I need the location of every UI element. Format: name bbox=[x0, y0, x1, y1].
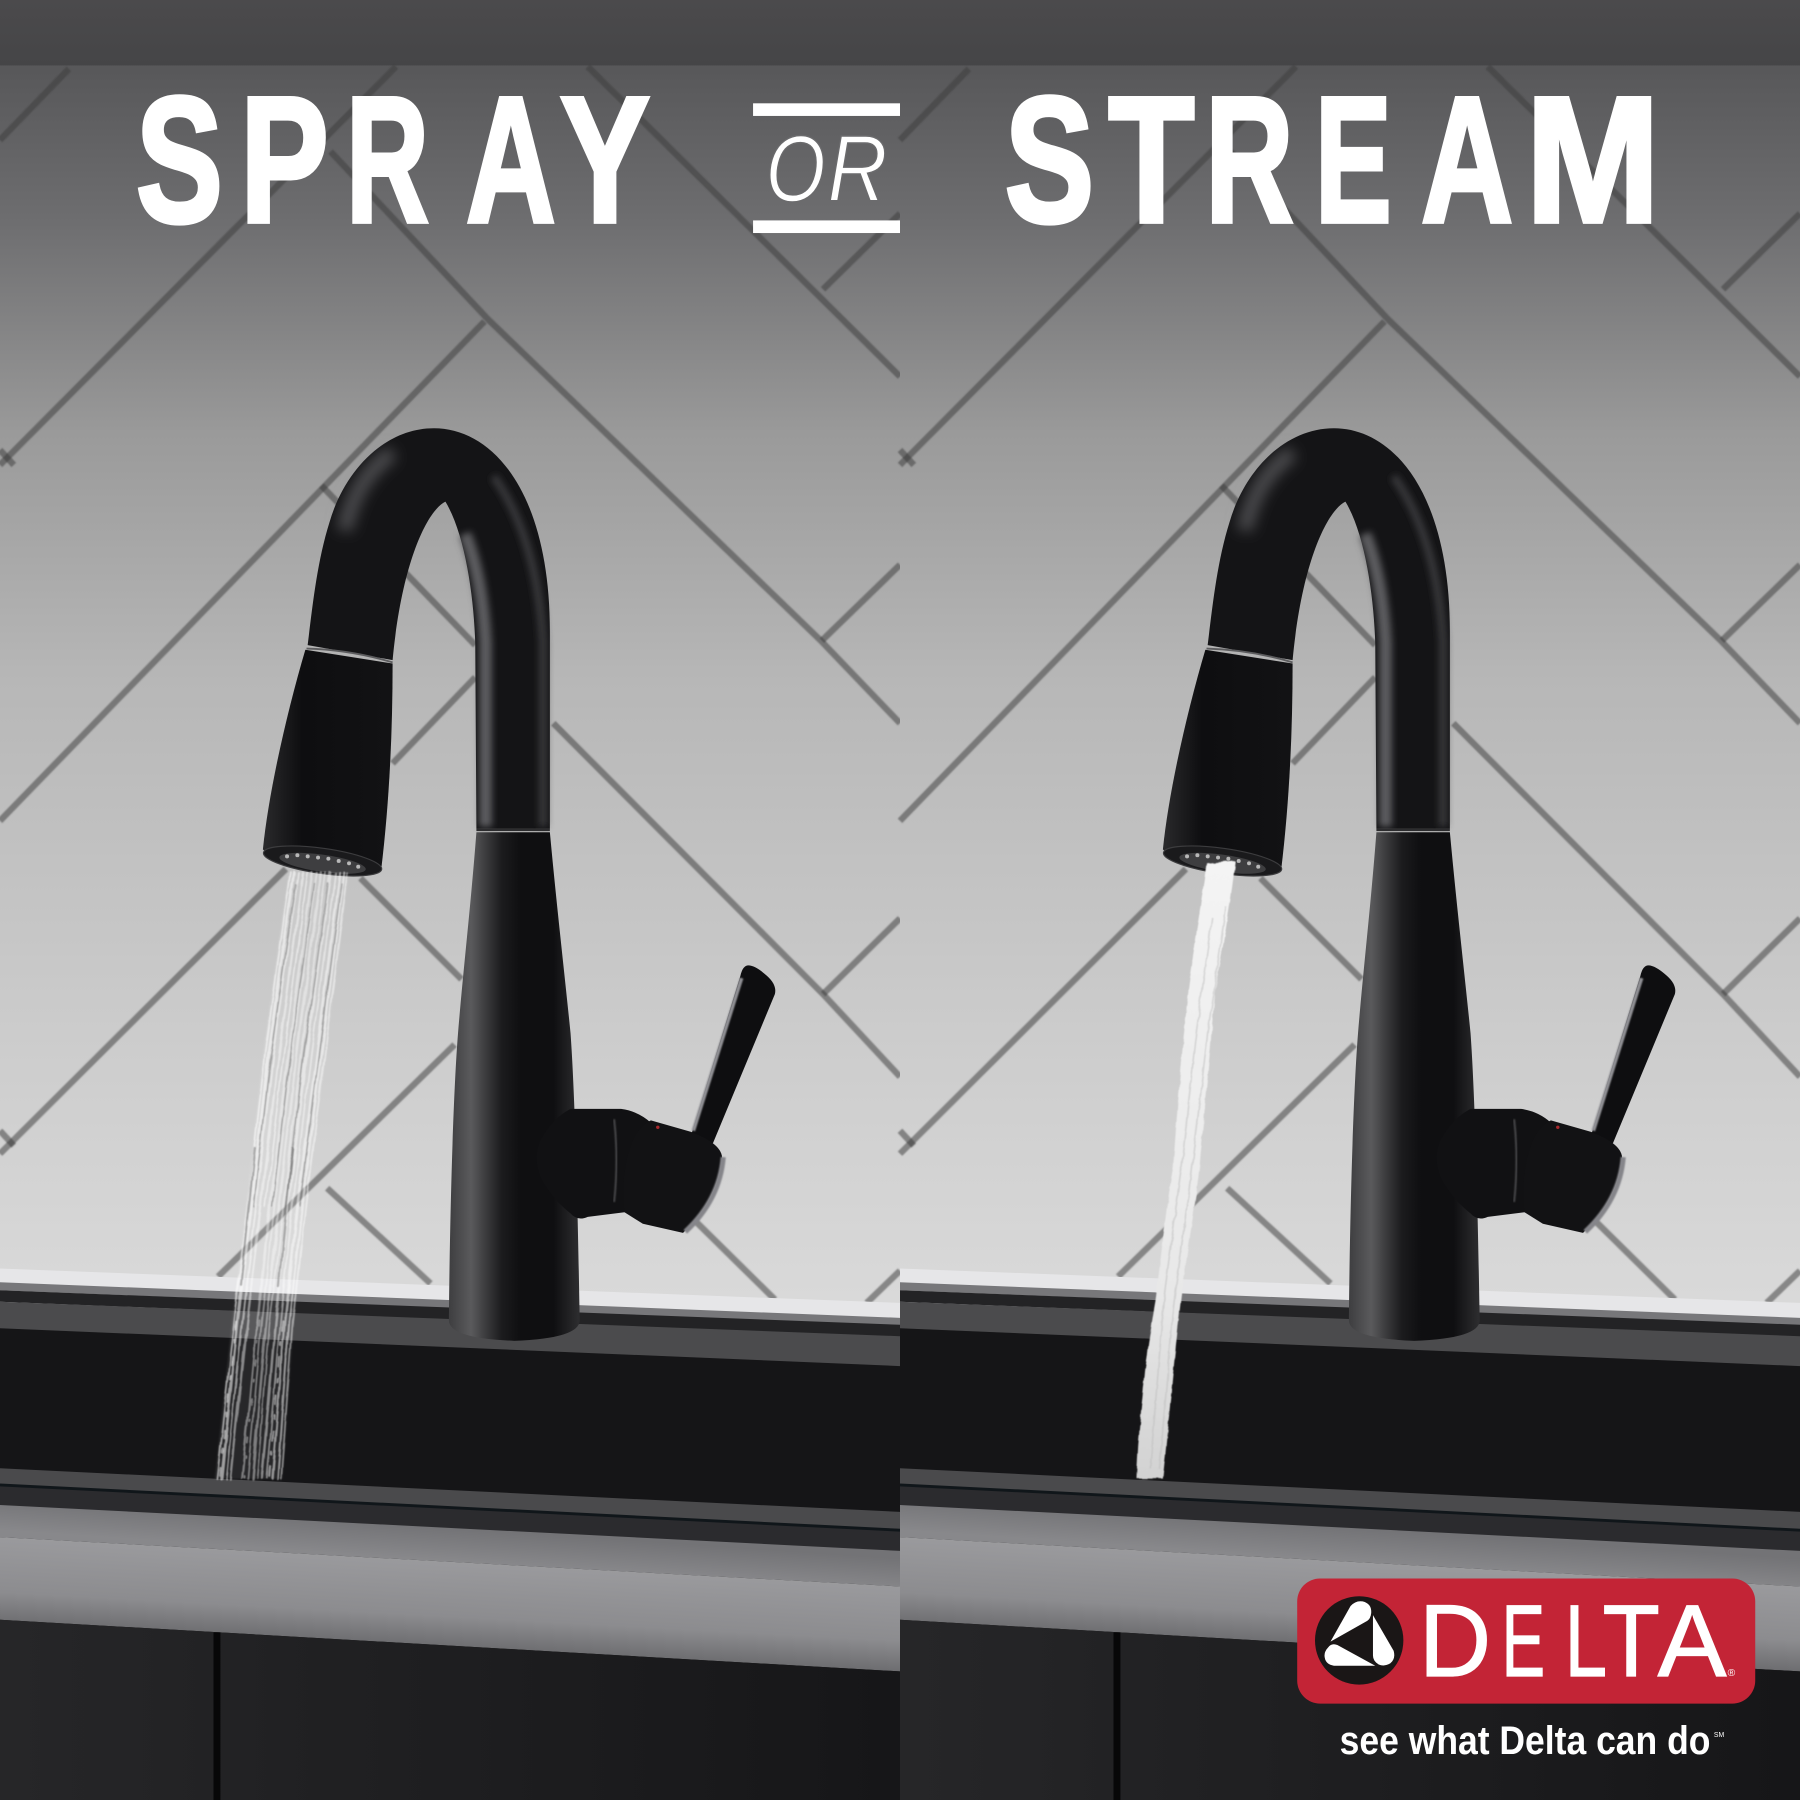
tagline: SM bbox=[1714, 1732, 1724, 1739]
logo wordmark: D bbox=[1419, 1584, 1491, 1698]
sink deck shadow bbox=[0, 1290, 900, 1337]
lip line bbox=[0, 1485, 900, 1530]
title: stream: A bbox=[1421, 60, 1513, 260]
sink lip upper bbox=[0, 1468, 900, 1530]
gooseneck spout bbox=[308, 428, 550, 829]
herringbone grout lines bbox=[0, 67, 900, 1303]
logo wordmark: ® bbox=[1728, 1668, 1736, 1679]
tile wall bbox=[0, 63, 900, 1320]
icon: delta triangle mark bbox=[1315, 1596, 1403, 1685]
faucet bbox=[262, 428, 775, 1341]
faucet body bbox=[449, 832, 580, 1341]
handle lever bbox=[691, 965, 775, 1143]
logo wordmark: E bbox=[1502, 1584, 1545, 1698]
water: stream bbox=[1136, 861, 1235, 1479]
water: spray bbox=[215, 872, 349, 1479]
logo: delta badge bbox=[1297, 1578, 1755, 1704]
title: spray bbox=[136, 60, 650, 260]
divider: or: O bbox=[766, 116, 825, 221]
sink front bbox=[0, 1328, 900, 1513]
spray head bbox=[263, 650, 393, 873]
spray haze bbox=[215, 872, 349, 1479]
title: stream: S bbox=[1005, 60, 1094, 260]
backsplash ledge bbox=[0, 1268, 900, 1319]
logo wordmark: T bbox=[1603, 1584, 1660, 1698]
title: spray: A bbox=[466, 60, 556, 260]
title: stream: T bbox=[1108, 60, 1194, 260]
ledge edge bbox=[0, 1282, 900, 1326]
sink deck bbox=[0, 1302, 900, 1367]
hot indicator bbox=[656, 1126, 660, 1129]
sink lip lower bbox=[0, 1484, 900, 1552]
title: stream bbox=[1005, 60, 1660, 260]
title: spray: S bbox=[136, 60, 223, 260]
divider: or bbox=[753, 103, 900, 233]
spray streaks bbox=[217, 872, 348, 1479]
logo wordmark: A bbox=[1658, 1584, 1727, 1698]
title: stream: R bbox=[1205, 60, 1293, 260]
handle knob bbox=[623, 1120, 722, 1233]
cabinets bbox=[0, 1620, 900, 1800]
title: stream: E bbox=[1315, 60, 1392, 260]
title: spray: R bbox=[346, 60, 429, 260]
counter edge lower bbox=[0, 1537, 900, 1671]
handle hub bbox=[537, 1109, 651, 1219]
counter edge upper bbox=[0, 1505, 900, 1586]
panel: stream (right) bbox=[900, 0, 1800, 1800]
spray face bbox=[262, 840, 383, 882]
panel: spray (left) bbox=[0, 0, 900, 1800]
logo wordmark: L bbox=[1565, 1584, 1607, 1698]
divider: or: R bbox=[828, 116, 887, 221]
top shadow band bbox=[0, 0, 900, 65]
title: stream: M bbox=[1526, 60, 1660, 260]
title: spray: P bbox=[240, 60, 329, 260]
logo wordmark bbox=[1419, 1584, 1736, 1698]
cabinet gap bbox=[214, 1632, 220, 1800]
title: spray: Y bbox=[560, 60, 650, 260]
tagline: see what Delta can do bbox=[1340, 1718, 1710, 1763]
